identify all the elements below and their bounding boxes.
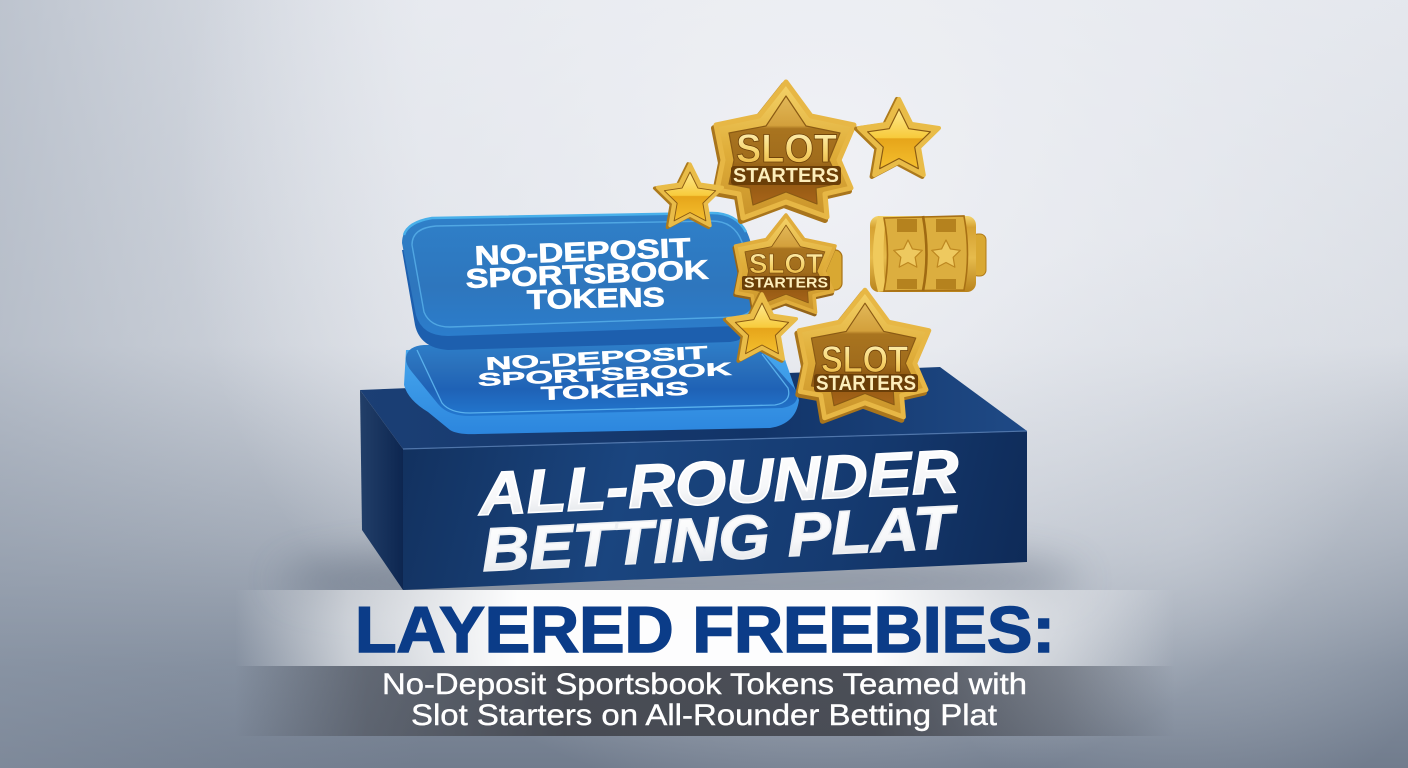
- subtitle line 2: Slot Starters on All-Rounder Betting Plat: [411, 699, 998, 732]
- lower tile text: SPORTSBOOK: [477, 359, 732, 390]
- badge text: SLOT: [736, 127, 837, 171]
- upper tile text: NO-DEPOSIT: [474, 233, 692, 271]
- subtitle line 1: No-Deposit Sportsbook Tokens Teamed with: [382, 668, 1027, 701]
- upper tile text: SPORTSBOOK: [465, 255, 710, 294]
- star badge: top slot starters: [714, 82, 854, 221]
- small star: left: [655, 164, 722, 227]
- small star: top right: [856, 99, 939, 177]
- block shadow: [280, 546, 1080, 614]
- small star: bottom: [725, 294, 796, 361]
- upper token tile: [402, 213, 764, 350]
- badge text: SLOT: [749, 248, 823, 279]
- lower tile text: [477, 342, 732, 405]
- lower tile text: NO-DEPOSIT: [485, 342, 708, 374]
- upper tile text: [465, 233, 710, 315]
- star badge: bottom slot starters: [797, 290, 929, 421]
- block left face: [360, 390, 403, 590]
- lower token tile: [404, 340, 799, 434]
- badge text: SLOT: [821, 339, 908, 380]
- badge text: [814, 339, 918, 395]
- block top face: [360, 367, 1027, 449]
- title band: [235, 590, 1175, 666]
- block text: all-rounder: ALL-ROUNDER: [475, 437, 960, 528]
- slot reel icon: [870, 216, 986, 292]
- badge text: [742, 248, 830, 292]
- badge text: STARTERS: [733, 165, 839, 187]
- badge text: [731, 127, 841, 187]
- star badge: middle slot starters: [735, 215, 835, 315]
- lower tile text: TOKENS: [540, 379, 689, 405]
- badge text: STARTERS: [816, 372, 916, 395]
- partial reel behind middle badge: [826, 250, 842, 290]
- badge text: STARTERS: [744, 276, 828, 292]
- upper tile text: TOKENS: [526, 282, 665, 315]
- block front face: [403, 431, 1027, 590]
- block text: betting plat: BETTING PLAT: [480, 493, 960, 584]
- pedestal block: [360, 367, 1027, 590]
- title: LAYERED FREEBIES:: [355, 593, 1055, 666]
- subtitle band: [235, 666, 1175, 736]
